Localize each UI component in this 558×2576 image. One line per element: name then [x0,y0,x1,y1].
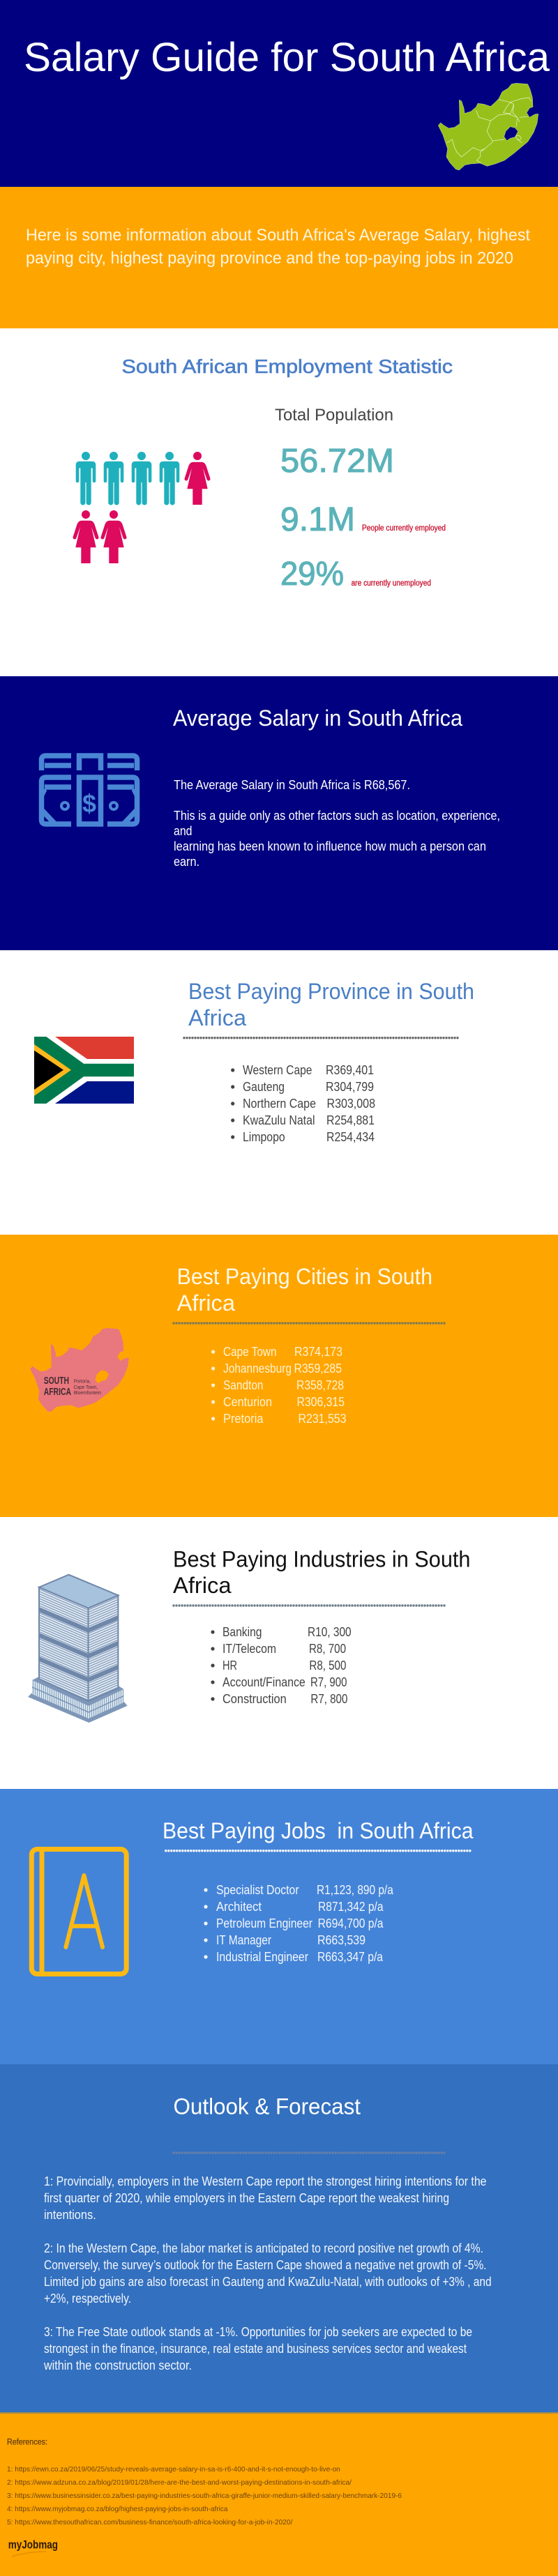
average salary text [174,778,500,869]
panel: references [0,2412,558,2576]
outlook text: first quarter of 2020, while employers in the Eastern Cape report the weakest hiring [44,2191,449,2205]
outlook text: strongest in the finance, insurance, real estate and business services sector and weakest [44,2342,467,2356]
icon: pink map of South Africa: Cape Town, [74,1384,98,1390]
panel: best paying industries [0,1517,558,1789]
list: provinces: Limpopo [243,1130,285,1144]
intro text: paying city, highest paying province and the top-paying jobs in 2020 [26,249,513,268]
icon: office building [28,1575,128,1723]
list: jobs: Industrial Engineer [216,1950,308,1964]
list: jobs: R663,347 p/a [317,1950,384,1964]
title: Salary Guide for South Africa [24,35,550,80]
list: jobs: Architect [216,1900,262,1914]
stat: employed: People currently employed [362,524,446,533]
outlook text: 1: Provincially, employers in the Western Cape report the strongest hiring intentions for the [44,2174,487,2188]
heading: average salary: Average Salary in South Africa [173,706,462,731]
average salary text: The Average Salary in South Africa is R68,567. [174,778,410,792]
panel: outlook and forecast [0,2064,558,2413]
average salary text: earn. [174,855,199,869]
average salary text: and [174,824,193,838]
people pictogram [73,452,211,563]
list: cities: Johannesburg [223,1362,292,1375]
average salary text: This is a guide only as other factors such as location, experience, [174,809,500,823]
list: industries: R8, 500 [309,1659,346,1672]
list: industries: HR [223,1659,237,1672]
heading: best paying industries: Africa [173,1573,232,1598]
list: provinces: R254,434 [326,1130,375,1144]
outlook text: Conversely, the survey’s outlook for the Eastern Cape showed a negative net growth of -5%. [44,2258,487,2272]
heading: employment statistic: South African Employment Statistic [121,356,453,377]
stat: employed: 9.1M [280,501,355,538]
list: industries: Account/Finance [223,1675,306,1689]
outlook text: 3: The Free State outlook stands at -1%. Opportunities for job seekers are expected to be [44,2325,472,2339]
references list: 5: https://www.thesouthafrican.com/business-finance/south-africa-looking-for-a-job-in-2020/ [7,2518,292,2527]
references list: 4: https://www.myjobmag.co.za/blog/highest-paying-jobs-in-south-africa [7,2505,228,2513]
list: industries: R7, 900 [310,1675,347,1689]
list: provinces: Gauteng [243,1080,285,1094]
panel: best paying cities [0,1235,558,1517]
heading: best paying province: Africa [188,1005,246,1030]
references list: 1: https://ewn.co.za/2019/06/25/study-reveals-average-salary-in-sa-is-r6-400-and-it-s-not-enough-to-live-on [7,2465,340,2474]
list: industries: IT/Telecom [223,1642,276,1656]
heading: outlook and forecast: Outlook & Forecast [173,2094,361,2119]
stat: total population: 56.72M [280,443,394,480]
heading: best paying industries: Best Paying Industries in South [173,1547,470,1572]
outlook text: within the construction sector. [43,2358,192,2372]
icon: money [42,756,137,824]
outlook text [43,2174,492,2372]
heading: best paying industries [173,1547,470,1598]
heading: best paying province [188,979,474,1030]
icon: pink map of South Africa: AFRICA [44,1387,71,1398]
panel: intro [0,187,558,328]
outlook text: Limited job gains are also forecast in Gauteng and KwaZulu-Natal, with outlooks of +3% , and [44,2275,492,2289]
list: jobs: R663,539 [317,1933,365,1947]
heading: best paying cities [177,1264,432,1316]
outlook text: 2: In the Western Cape, the labor market is anticipated to record positive net growth of 4%. [44,2241,483,2255]
list: jobs: R694,700 p/a [318,1916,384,1930]
references list: 3: https://www.businessinsider.co.za/best-paying-industries-south-africa-giraffe-junior-medium-skilled-salary-benchmark-2019-6 [7,2492,402,2500]
references list: 2: https://www.adzuna.co.za/blog/2019/01/28/here-are-the-best-and-worst-paying-destinations-in-south-africa/ [7,2478,352,2487]
list: provinces: Western Cape [243,1063,312,1077]
icon: South African flag [34,1037,134,1104]
stat: unemployed: are currently unemployed [352,579,431,588]
intro text [26,226,530,268]
list: cities: Centurion [223,1395,272,1409]
heading: best paying cities: Africa [177,1290,235,1316]
logo: myJobmag: myJobmag [8,2538,58,2552]
label: total population: Total Population [275,406,393,425]
outlook text: +2%, respectively. [44,2292,131,2306]
list: jobs: R871,342 p/a [318,1900,384,1914]
intro text: Here is some information about South Africa's Average Salary, highest [26,226,530,245]
list: cities: R374,173 [294,1345,342,1359]
list: provinces: R303,008 [326,1097,375,1111]
average salary text: learning has been known to influence how much a person can [174,839,486,853]
icon: green map of South Africa [438,83,538,170]
list: industries: R10, 300 [308,1625,352,1639]
list: provinces: R369,401 [326,1063,374,1077]
list: cities: Cape Town [223,1345,276,1359]
stat: unemployed [280,556,431,593]
references heading: References: [7,2439,47,2447]
list: jobs: R1,123, 890 p/a [317,1883,394,1897]
list: industries: R7, 800 [310,1692,347,1706]
heading: best paying cities: Best Paying Cities in South [177,1264,432,1289]
list: provinces: R254,881 [326,1113,375,1127]
list: cities: Pretoria [223,1412,264,1426]
icon: pink map of South Africa [30,1328,129,1412]
icon: pink map of South Africa: Pretoria, [74,1378,91,1385]
list: jobs: Specialist Doctor [216,1883,299,1897]
list: jobs [204,1883,394,1964]
list: industries: Construction [223,1692,287,1706]
list: provinces [231,1063,375,1144]
list: industries: Banking [223,1625,262,1639]
icon: pink map of South Africa: Bloemfontein [74,1389,101,1396]
heading: best paying jobs: Best Paying Jobs in South Africa [163,1818,474,1843]
outlook text: intentions. [44,2208,96,2222]
list: jobs: Petroleum Engineer [216,1916,312,1930]
list: cities: R231,553 [299,1412,346,1426]
list: jobs: IT Manager [216,1933,271,1947]
list: cities: Sandton [223,1378,264,1392]
list: cities [211,1345,346,1426]
stat: employed [280,501,446,538]
panel: employment statistics [0,328,558,676]
list: provinces: KwaZulu Natal [243,1113,315,1127]
heading: best paying province: Best Paying Province in South [188,979,474,1004]
list: industries [211,1625,352,1706]
list: industries: R8, 700 [309,1642,346,1656]
icon: money: $ [82,789,96,818]
logo: myJobmag [8,2538,58,2556]
list: cities: R306,315 [297,1395,345,1409]
panel: best paying jobs [0,1789,558,2064]
panel: average salary [0,676,558,950]
panel: best paying province [0,950,558,1235]
stat: unemployed: 29% [280,556,344,593]
icon: book with letter A [31,1849,126,1974]
list: cities: R359,285 [294,1362,342,1375]
panel: header [0,0,558,187]
list: cities: R358,728 [296,1378,344,1392]
icon: pink map of South Africa: SOUTH [44,1375,69,1387]
list: provinces: Northern Cape [243,1097,316,1111]
references list [7,2465,402,2527]
list: provinces: R304,799 [326,1080,374,1094]
